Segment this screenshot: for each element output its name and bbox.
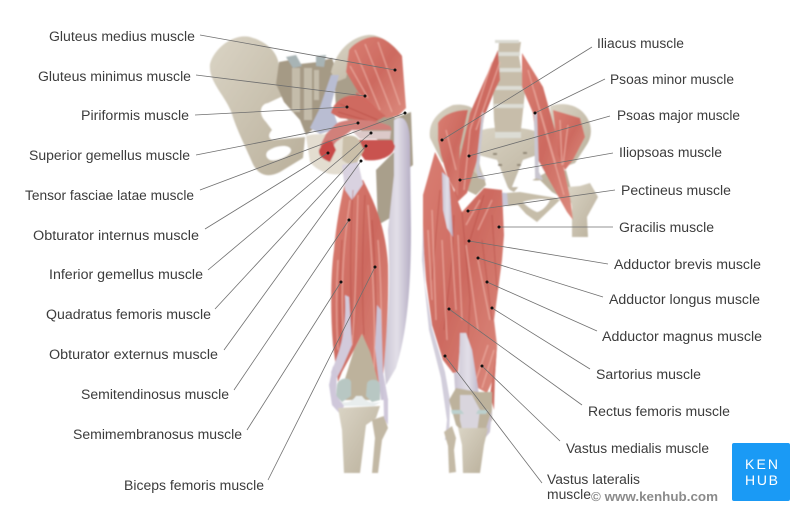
leader: obturator internus — [205, 153, 328, 229]
femur neck and ischium — [306, 130, 347, 174]
logo: Kenhub: KEN — [745, 456, 778, 472]
piriformis fibers — [338, 104, 378, 122]
inferior gemellus — [352, 131, 391, 139]
obturator internus — [319, 140, 336, 162]
label: Adductor magnus muscle: Adductor magnus muscle — [602, 329, 762, 344]
leader: psoas minor — [535, 79, 605, 113]
illustration: anterior view of pelvis and thigh — [422, 40, 598, 473]
fibula — [444, 426, 456, 473]
label: Adductor brevis muscle: Adductor brevis muscle — [614, 257, 761, 272]
leader: semitendinosus — [234, 220, 349, 390]
label: Rectus femoris muscle: Rectus femoris muscle — [588, 404, 730, 419]
leader: tensor fasciae latae — [200, 113, 405, 190]
sartorius tendon band — [442, 172, 453, 237]
leader: adductor longus — [478, 258, 603, 297]
quadriceps tendon — [454, 333, 482, 447]
left iliacus — [438, 110, 468, 196]
label: Gracilis muscle: Gracilis muscle — [619, 220, 714, 235]
illustration: posterior view of pelvis and thigh — [210, 35, 413, 473]
leader: iliacus — [442, 47, 592, 140]
menisci — [338, 396, 381, 406]
tibia — [458, 428, 488, 473]
gluteus medius — [346, 37, 406, 118]
label: Quadratus femoris muscle: Quadratus femoris muscle — [46, 307, 211, 322]
leader: gluteus medius — [200, 35, 395, 70]
label: Tensor fasciae latae muscle: Tensor fasciae latae muscle — [25, 188, 194, 203]
lower leg: fibula — [372, 416, 388, 473]
superior gemellus and internus — [320, 120, 392, 150]
right iliacus — [553, 110, 585, 170]
pubic rami — [506, 192, 560, 222]
leader: adductor magnus — [487, 282, 597, 331]
labels: right column — [547, 36, 762, 502]
leader lines and pointer dots: left labels — [195, 35, 406, 480]
iliac crest rim — [331, 35, 402, 82]
copyright: © www.kenhub.com — [591, 489, 718, 504]
medial and lateral condyles — [336, 378, 380, 402]
label: Adductor longus muscle: Adductor longus muscle — [609, 292, 760, 307]
pelvic foramen right — [512, 153, 545, 187]
label: Semitendinosus muscle: Semitendinosus muscle — [81, 387, 229, 402]
label: Pectineus muscle: Pectineus muscle — [621, 183, 731, 198]
deep psoas muscle slips right — [522, 62, 540, 128]
label: Obturator internus muscle: Obturator internus muscle — [33, 228, 199, 243]
label: Vastus lateralis muscle: Vastus lateralis — [547, 472, 640, 487]
leader: piriformis — [195, 107, 347, 115]
pes anserinus fascia — [329, 366, 344, 414]
sacral foramina — [493, 152, 527, 166]
deep psoas muscle slips left — [478, 62, 498, 122]
hamstring fibers — [336, 195, 381, 370]
lumbar vertebra discs — [494, 40, 524, 138]
label: Psoas major muscle: Psoas major muscle — [617, 108, 740, 123]
hamstring dark grooves — [340, 190, 376, 360]
right femur — [568, 183, 598, 237]
obturator foramen — [266, 146, 291, 160]
acetabulum bone right — [540, 170, 575, 205]
distal femur — [344, 334, 378, 400]
labels: left column — [25, 29, 264, 493]
sacral vertebra highlights — [292, 68, 319, 120]
sacrum — [276, 58, 336, 135]
lumbar spine — [493, 42, 525, 138]
lower leg: tibia — [338, 406, 380, 473]
label: Vastus medialis muscle: Vastus medialis muscle — [566, 441, 709, 456]
muscle fibers — [428, 200, 494, 388]
label: Superior gemellus muscle: Superior gemellus muscle — [29, 148, 190, 163]
left psoas — [452, 50, 500, 207]
leader: rectus femoris — [449, 309, 582, 405]
left hip bone — [210, 36, 305, 175]
knee joint bones — [449, 388, 492, 440]
label: Inferior gemellus muscle: Inferior gemellus muscle — [49, 267, 203, 282]
right obturator foramen — [523, 199, 550, 212]
label: Iliacus muscle: Iliacus muscle — [597, 36, 684, 51]
label: Piriformis muscle: Piriformis muscle — [81, 108, 189, 123]
semimembranosus tendon — [375, 305, 388, 400]
iliopsoas fibers — [446, 62, 568, 195]
right psoas — [522, 53, 573, 220]
label: Sartorius muscle: Sartorius muscle — [596, 367, 701, 382]
pes anserinus — [482, 410, 492, 442]
gluteus minimus — [356, 92, 384, 116]
hamstring origin tendon — [342, 162, 363, 200]
leader: psoas major — [469, 116, 610, 156]
leader: gracilis — [499, 226, 613, 228]
leader: superior gemellus — [196, 123, 358, 155]
label: Biceps femoris muscle: Biceps femoris muscle — [124, 478, 264, 493]
label: Psoas minor muscle: Psoas minor muscle — [610, 72, 734, 87]
label: Semimembranosus muscle: Semimembranosus muscle — [73, 427, 242, 442]
fascia edge at fibula — [383, 372, 388, 425]
left iliac blade — [430, 105, 472, 170]
label: Gluteus medius muscle: Gluteus medius muscle — [49, 29, 195, 44]
leader: vastus medialis — [482, 366, 560, 441]
label: Iliopsoas muscle: Iliopsoas muscle — [619, 145, 722, 160]
sartorius distal edge — [490, 345, 497, 410]
leader: adductor brevis — [469, 241, 608, 264]
quadratus femoris — [356, 140, 395, 160]
leader: gluteus minimus — [196, 75, 365, 96]
leader: semimembranosus — [247, 282, 341, 430]
iliotibial tract — [422, 225, 450, 440]
leader: obturator externus — [224, 161, 361, 350]
leader lines and pointer dots: right labels — [440, 47, 615, 483]
piriformis — [331, 95, 386, 122]
patellar ligament overlay — [460, 395, 480, 447]
pubic disc — [492, 192, 508, 207]
right iliac blade — [550, 104, 591, 170]
label: Vastus lateralis muscle: muscle — [547, 487, 591, 502]
proximal femur and ilium behind muscles — [334, 60, 413, 225]
ischial tuberosity — [342, 136, 364, 168]
menisci front — [451, 410, 488, 414]
leader: inferior gemellus — [208, 133, 371, 270]
pelvic ring and sacrum — [472, 127, 552, 192]
logo: Kenhub — [732, 443, 790, 501]
logo: Kenhub: HUB — [745, 472, 778, 488]
leader: vastus lateralis — [445, 356, 542, 483]
acetabulum bone left — [465, 160, 486, 195]
thigh muscle mass — [423, 152, 504, 393]
pointer dots left — [326, 68, 406, 284]
gluteus medius fibers — [350, 42, 400, 112]
label: Obturator externus muscle: Obturator externus muscle — [49, 347, 218, 362]
muscle groove shadows — [432, 190, 497, 340]
semitendinosus tendon — [331, 295, 352, 385]
leader: iliopsoas — [460, 153, 613, 180]
sacrotuberous ligament — [310, 75, 339, 134]
label: Gluteus minimus muscle: Gluteus minimus muscle — [38, 69, 191, 84]
hamstring muscle mass — [331, 180, 388, 388]
leader: biceps femoris — [268, 267, 375, 480]
iliotibial tract — [383, 118, 411, 385]
leader: sartorius — [492, 308, 590, 369]
sacral ala tips — [286, 55, 326, 68]
psoas minor tendon right — [534, 113, 543, 180]
psoas minor tendon left — [476, 112, 486, 180]
pelvic foramen left — [478, 155, 508, 188]
leader: quadratus femoris — [215, 146, 366, 309]
leader: pectineus — [468, 190, 615, 211]
pointer dots right — [440, 112, 536, 368]
